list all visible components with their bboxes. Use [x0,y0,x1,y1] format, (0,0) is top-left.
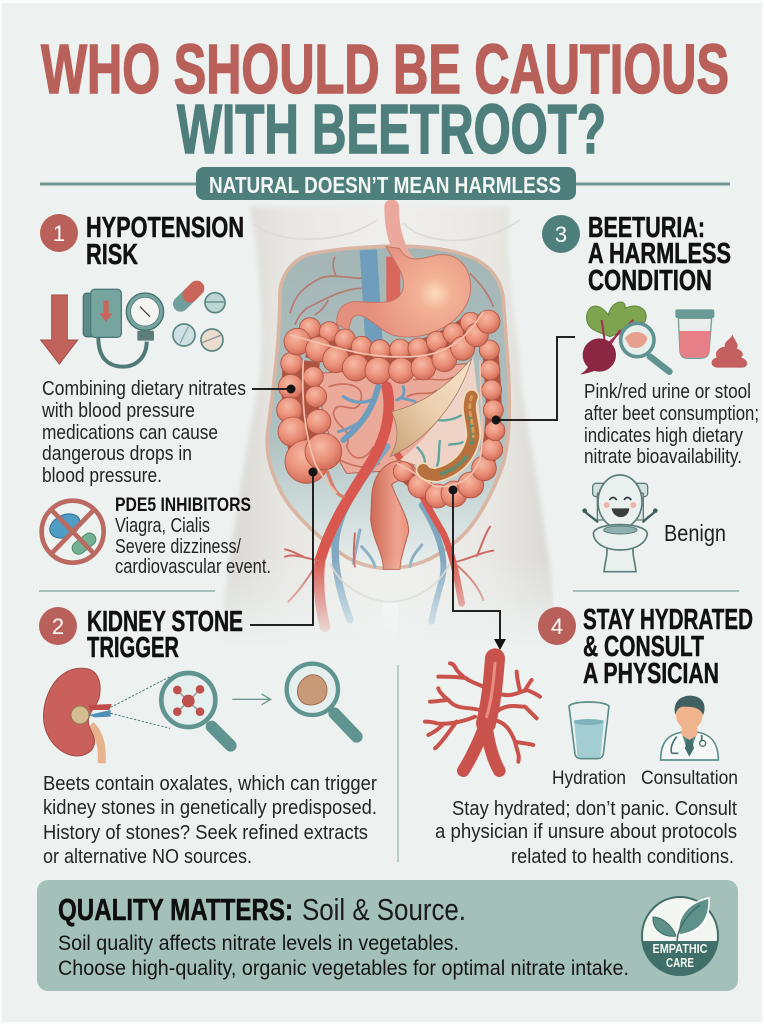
rectum and sigmoid [370,460,416,570]
body text 1 [41,378,246,487]
number badge 4: 4 [551,614,563,639]
section 3: beeturia [542,212,759,572]
colon tenia bands [290,312,483,493]
PDE5 inhibitors text: cardiovascular event. [115,556,271,578]
body text 2: History of stones? Seek refined extracts [43,822,368,844]
body text 4 [435,798,737,868]
colon: transverse [284,310,500,384]
heading 4 [583,604,753,690]
colon: transverse underlay [308,325,478,361]
red aorta upper [386,256,400,302]
peeled flap [390,358,472,457]
illustration: artery tree [425,658,540,771]
heading 3 [588,212,731,297]
panel: quality matters [37,880,738,991]
section 1: hypotension risk [40,212,271,578]
body text 3: nitrate bioavailability. [584,446,742,468]
body text 1: blood pressure. [42,465,162,487]
body text 1: dangerous drops in [42,443,192,465]
heading 3: CONDITION [588,265,712,297]
icon: happy toilet [582,475,658,572]
number badge 3: 3 [555,222,567,247]
number badge 2: 2 [52,614,64,639]
colon: descending and sigmoid [393,340,505,508]
opened colon lumen [423,397,473,475]
appendix [327,472,343,497]
heading 1: HYPOTENSION [86,212,244,244]
icon: no PDE5 pills [42,501,104,563]
icon labels: Consultation [641,768,738,789]
colon: descending underlay [407,347,494,493]
icon: beet, urine cup and stool [580,302,747,374]
number badge 3 [542,215,580,253]
subtitle banner: NATURAL DOESN’T MEAN HARMLESS [209,172,561,198]
pelvic contour [330,563,450,602]
body text 2 [43,773,377,868]
inner leg gap [383,603,399,640]
heading 1 [86,212,244,271]
oesophagus [392,207,407,262]
heading 2: KIDNEY STONE [87,606,243,638]
upper cavity vessels [290,257,493,325]
badge: empathic care: CARE [666,955,694,970]
quality text: Soil quality affects nitrate levels in vegetables. [58,932,459,955]
torso silhouette [220,207,560,647]
body text 4: related to health conditions. [511,846,734,868]
tissue vessels [417,415,463,467]
colon: ascending and cecum [277,352,342,483]
colon: ascending underlay [300,360,308,453]
number badge 4 [538,607,576,645]
body text 2: Beets contain oxalates, which can trigger [43,773,377,795]
callout lines [250,337,575,642]
callout dots and arrowhead [286,384,506,650]
abdominal cavity [267,246,509,568]
PDE5 inhibitors text: PDE5 INHIBITORS [115,495,251,516]
number badge 1 [40,214,78,252]
subtitle banner [40,167,730,200]
heading 2: TRIGGER [87,632,179,664]
heading 1: RISK [86,239,138,271]
stomach [337,247,471,337]
chest contours [253,220,520,240]
badge: empathic care: EMPATHIC [652,941,708,956]
number badge 1: 1 [53,221,65,246]
icon labels [552,768,738,789]
benign label: Benign [664,520,726,546]
small intestine [320,363,470,473]
section 4: stay hydrated [425,604,753,868]
PDE5 inhibitors text: Severe dizziness/ [115,536,241,558]
icon: kidney and magnifiers [44,664,357,763]
icon: doctor [661,696,718,760]
heading 3: BEETURIA: [588,212,705,244]
body text 4: a physician if unsure about protocols [435,821,737,843]
heading 4: & CONSULT [583,631,704,663]
lower arteries and veins [285,387,493,627]
title [41,30,729,168]
body text 1: Combining dietary nitrates [42,378,246,400]
quality heading: QUALITY MATTERS: [58,892,293,927]
icon: water glass [569,702,609,759]
heading 2 [87,606,243,664]
section 2: kidney stone trigger [39,606,377,868]
body text 2: or alternative NO sources. [43,846,252,868]
central anatomy illustration [220,207,560,647]
quality text [58,932,629,980]
body text 1: medications can cause [42,422,218,444]
icon labels: Hydration [552,768,626,789]
blue vena cava [368,250,374,343]
mesenteric veins [338,387,415,440]
quality text: Choose high-quality, organic vegetables for optimal nitrate intake. [58,957,629,980]
quality heading: Soil & Source. [302,892,466,927]
PDE5 inhibitors text [115,495,271,578]
icon: blood pressure and pills [41,288,225,367]
body text 3 [584,381,759,468]
body text 4: Stay hydrated; don’t panic. Consult [452,798,737,820]
number badge 2 [39,607,77,645]
body text 1: with blood pressure [41,400,195,422]
heading 4: A PHYSICIAN [583,658,719,690]
badge: empathic care [642,897,718,975]
exposed inner tissue [400,357,482,477]
PDE5 inhibitors text: Viagra, Cialis [115,515,210,537]
body text 2: kidney stones in genetically predisposed. [43,797,377,819]
